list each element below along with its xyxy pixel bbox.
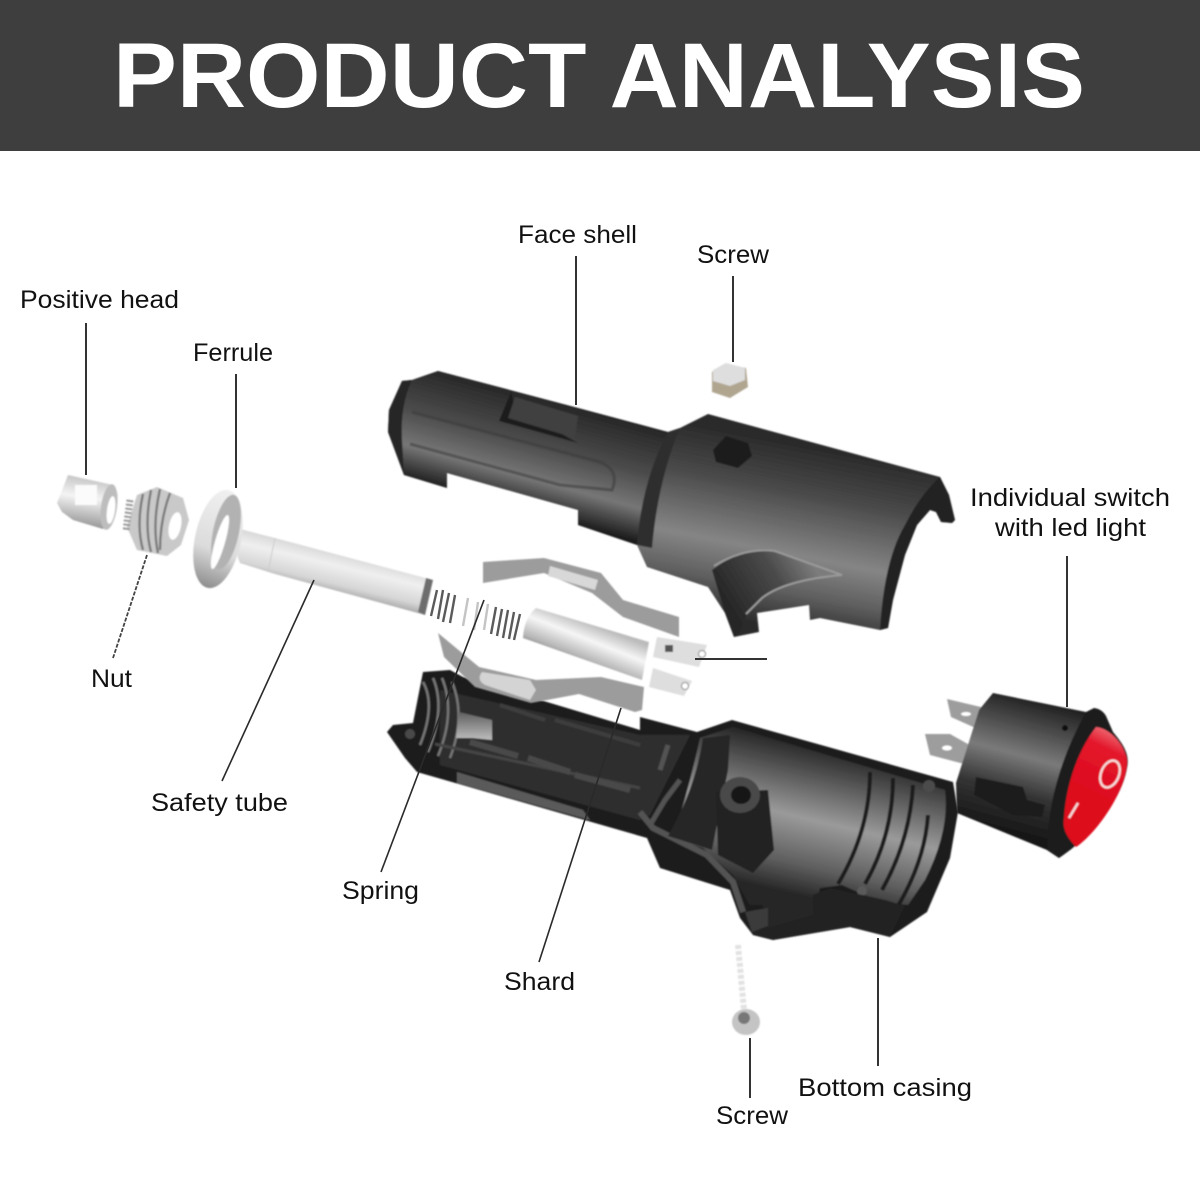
part: upper shard (483, 558, 679, 637)
label: spring (342, 600, 484, 905)
label: face shell: Face shell (518, 221, 637, 249)
label: screw top: Screw (697, 241, 770, 269)
part: terminals (649, 637, 707, 696)
part: contact cylinder (523, 608, 649, 680)
shell window slot (499, 392, 578, 443)
part: bottom casing (387, 670, 958, 940)
casing crescent shadow (668, 735, 730, 850)
casing channel interior (440, 690, 690, 820)
part: lower shard (438, 633, 644, 712)
red rocker (1064, 727, 1127, 847)
casing lower stripe (457, 772, 590, 820)
label: spring: Spring (342, 877, 419, 905)
label: safety tube: Safety tube (151, 789, 288, 817)
part: face shell (388, 371, 955, 637)
casing ribs (838, 772, 928, 906)
part: switch (925, 693, 1128, 858)
part: ferrule (185, 485, 251, 593)
shell underside grip (712, 549, 842, 637)
switch terminals (947, 699, 985, 730)
shell hex screw hole (713, 436, 752, 468)
casing bowl (673, 727, 946, 928)
label: shard: Shard (504, 968, 575, 996)
switch body (956, 693, 1090, 858)
label: individual switch (970, 484, 1170, 707)
label: nut (91, 555, 147, 693)
part: screw bottom (732, 945, 760, 1035)
header banner (0, 0, 1200, 151)
casing rails (435, 744, 640, 788)
part: threaded nut (126, 487, 189, 556)
part: screw top (712, 363, 748, 398)
casing screw post (716, 790, 774, 873)
label: individual switch: with led light (994, 514, 1146, 542)
casing left threaded end (420, 678, 459, 758)
casing lower flange (745, 888, 905, 940)
casing boss (405, 729, 415, 739)
label: ferrule: Ferrule (193, 339, 273, 367)
part: positive head (57, 475, 120, 531)
switch bezel (1047, 708, 1128, 858)
shell open end (880, 477, 955, 630)
label: shard (504, 708, 621, 996)
label: screw bottom: Screw (716, 1102, 789, 1130)
label: positive head: Positive head (20, 286, 179, 314)
label: bottom casing: Bottom casing (798, 1074, 972, 1102)
label: nut: Nut (91, 665, 132, 693)
casing gray patch (456, 712, 492, 740)
shell collar band (637, 428, 680, 548)
casing bolt holes (923, 780, 935, 792)
part: spring (431, 590, 520, 640)
label: screw bottom (716, 1038, 789, 1130)
casing inner wall (640, 812, 743, 912)
part: safety tube (236, 529, 433, 615)
title: PRODUCT ANALYSIS (113, 25, 1085, 127)
leader: terminal (695, 658, 767, 660)
shell left rim (388, 380, 412, 475)
rocker O symbol (1096, 758, 1124, 790)
rocker I symbol (1069, 803, 1078, 818)
label: screw top (697, 241, 770, 362)
shell long groove (410, 412, 614, 490)
label: safety tube (151, 580, 314, 817)
label: individual switch: Individual switch (970, 484, 1170, 512)
